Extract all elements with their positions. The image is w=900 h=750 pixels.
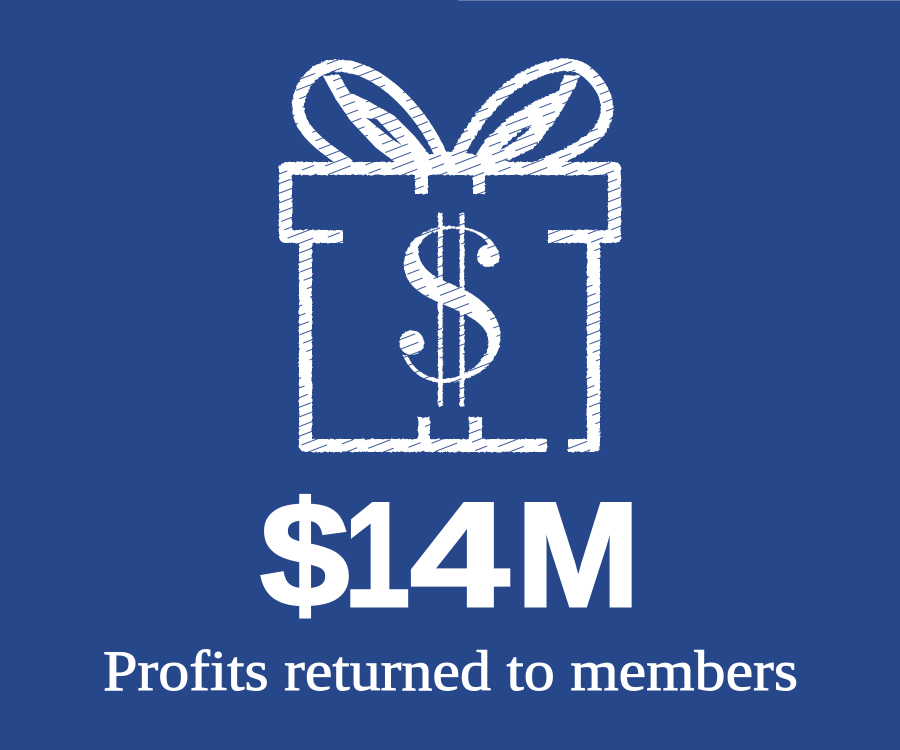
big number: 4 [410, 471, 509, 638]
icon: box lid [286, 168, 614, 236]
icon: gift box with dollar sign [286, 65, 614, 446]
big number: 1 [344, 471, 410, 638]
icon: ribbon bow [298, 65, 607, 168]
big number: $ [260, 471, 350, 638]
icon: dollar sign [399, 213, 501, 407]
big number [260, 471, 640, 638]
icon: box body [306, 243, 594, 446]
big number: M [516, 471, 640, 638]
caption: Profits returned to members [103, 640, 798, 703]
top edge line [458, 0, 900, 1]
icon: ribbon stubs [415, 175, 485, 440]
